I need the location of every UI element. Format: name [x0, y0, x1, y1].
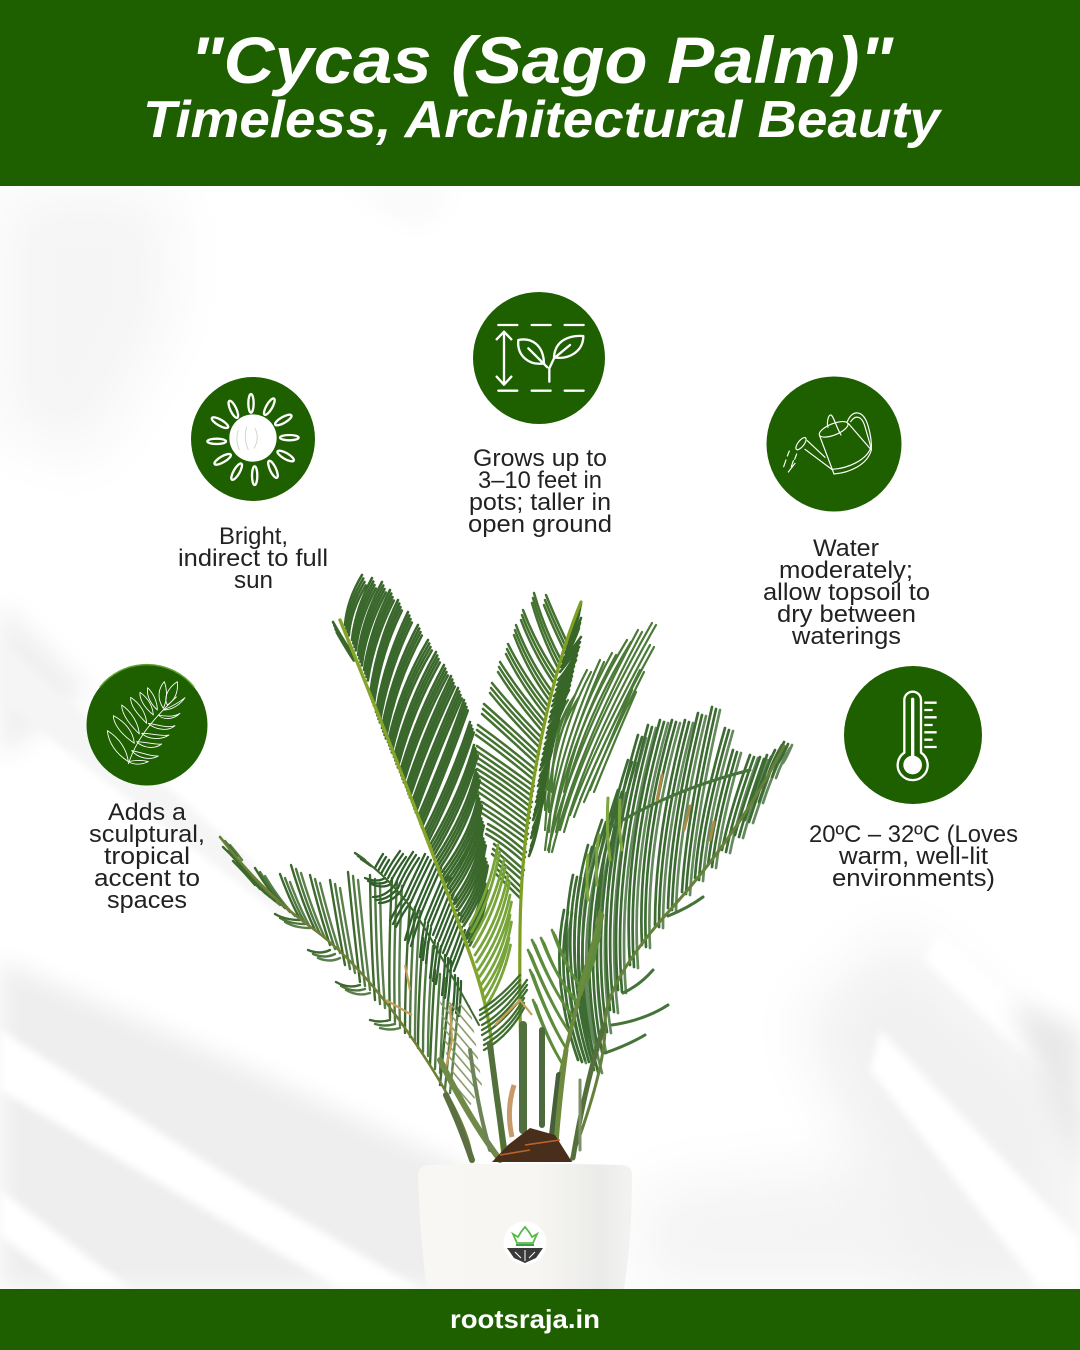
text: water: dry between: [777, 601, 916, 628]
frond: bright inner left: [470, 845, 527, 1050]
text: temperature: environments): [832, 865, 995, 892]
text: light: [178, 523, 328, 594]
header banner: [0, 0, 1080, 186]
text: decor: accent to: [94, 865, 200, 892]
text: height: 3–10 feet in: [478, 467, 602, 494]
text: temperature: 20ºC – 32ºC (Loves: [809, 821, 1018, 848]
text: light: Bright,: [219, 523, 288, 550]
item: light: [178, 377, 328, 594]
item: decor: [86, 664, 208, 914]
frond: dark mid-left: [355, 851, 479, 1025]
item: water: [763, 376, 930, 650]
text: height: pots; taller in: [469, 489, 611, 516]
title line 1: "Cycas (Sago Palm)": [190, 23, 894, 97]
footer banner: [0, 1289, 1080, 1350]
text: height: open ground: [468, 511, 612, 538]
text: water: moderately;: [779, 557, 913, 584]
white plant pot: [418, 1164, 632, 1289]
text: height: Grows up to: [473, 445, 607, 472]
title line 2: Timeless, Architectural Beauty: [143, 91, 943, 149]
text: temperature: [809, 821, 1018, 892]
frond: tall centre: [475, 593, 581, 1130]
pale lower leaflets: [440, 1000, 482, 1115]
item: height: [468, 292, 612, 538]
dried leaflets: [386, 965, 532, 1070]
frond: back right of centre: [545, 623, 656, 852]
text: decor: sculptural,: [89, 821, 205, 848]
icon: plant height: [473, 292, 605, 424]
text: decor: spaces: [107, 887, 187, 914]
text: water: [763, 535, 930, 650]
text: decor: Adds a: [108, 799, 186, 826]
text: water: allow topsoil to: [763, 579, 930, 606]
text: temperature: warm, well-lit: [838, 843, 988, 870]
icon: palm leaf: [86, 664, 208, 786]
text: light: sun: [234, 567, 273, 594]
text: water: Water: [813, 535, 879, 562]
fiddlehead and root crown: [492, 1085, 572, 1162]
text: decor: [89, 799, 205, 914]
frond: inner right: [528, 910, 603, 1160]
icon: watering can: [766, 376, 902, 512]
frond: tall left: [333, 575, 503, 1155]
text: height: [468, 445, 612, 538]
frond: large right: [559, 707, 792, 1160]
item: temperature: [809, 666, 1018, 892]
stems: [440, 1025, 604, 1160]
text: decor: tropical: [104, 843, 190, 870]
text: water: waterings: [791, 623, 901, 650]
pot logo badge: [504, 1222, 546, 1264]
icon: thermometer: [844, 666, 982, 804]
plant: cycas sago palm: [220, 575, 792, 1162]
text: light: indirect to full: [178, 545, 328, 572]
icon: sun: [191, 377, 315, 501]
footer website text: rootsraja.in: [450, 1304, 600, 1334]
frond: far left: [220, 837, 472, 1160]
